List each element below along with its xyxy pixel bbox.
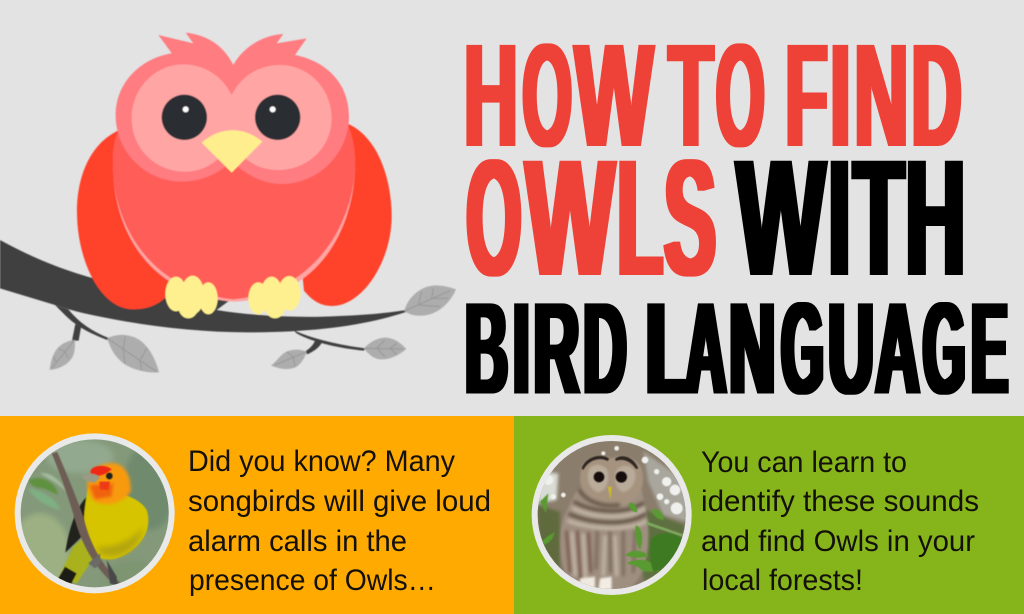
title xyxy=(464,14,1008,422)
title line 3: G xyxy=(781,274,824,422)
head with ear tufts xyxy=(116,33,349,184)
title line 3: G xyxy=(923,274,965,422)
title line 1: I xyxy=(830,14,851,178)
title line 2: W xyxy=(526,126,615,311)
title line 1: T xyxy=(668,14,713,178)
text: you can learn xyxy=(701,446,979,597)
title line 2 xyxy=(466,126,966,311)
title line 3: N xyxy=(729,274,775,422)
text: did you know: presence of Owls… xyxy=(189,564,436,597)
wings xyxy=(77,124,392,309)
illustration: owl on a branch xyxy=(0,33,456,373)
beak xyxy=(202,130,262,173)
title line 3: D xyxy=(583,274,626,422)
title line 3: R xyxy=(534,274,579,422)
branch xyxy=(0,240,406,354)
text: you can learn: and find Owls in your xyxy=(701,525,975,558)
title line 1: N xyxy=(854,14,908,178)
title line 1: O xyxy=(522,14,572,178)
panel: orange songbird fact xyxy=(0,416,514,614)
photo: western tanager xyxy=(10,433,177,593)
title line 2: S xyxy=(664,126,716,311)
title line 2: O xyxy=(466,126,521,311)
title line 3: U xyxy=(828,274,874,422)
feet xyxy=(165,276,301,318)
title line 1: F xyxy=(785,14,828,178)
text: you can learn: identify these sounds xyxy=(701,485,979,518)
title line 2: W xyxy=(736,126,826,311)
eyes xyxy=(162,95,207,140)
body xyxy=(113,127,355,302)
title line 3: A xyxy=(876,274,920,422)
title: D xyxy=(911,14,962,178)
title line 2: T xyxy=(853,126,904,311)
title line 1: O xyxy=(716,14,765,178)
text: did you know: Did you know? Many xyxy=(188,445,455,478)
leaves xyxy=(50,285,456,373)
title line 1: W xyxy=(575,14,653,178)
title line 3: A xyxy=(685,274,726,422)
title line 3 xyxy=(465,274,1008,422)
title line 2: H xyxy=(905,126,966,311)
text: did you know xyxy=(188,445,491,597)
text: did you know: songbirds will give loud xyxy=(188,485,491,518)
text: did you know: alarm calls in the xyxy=(188,525,407,558)
panel: green learn sounds xyxy=(514,416,1024,614)
title line 3: B xyxy=(465,274,508,422)
text: you can learn: local forests! xyxy=(702,564,863,597)
title line 1 xyxy=(464,14,962,178)
title line 1: H xyxy=(464,14,518,178)
title line 2: L xyxy=(617,126,663,311)
text: you can learn: You can learn to xyxy=(701,446,907,479)
title line 2: I xyxy=(828,126,850,311)
title line 3: I xyxy=(513,274,529,422)
eye discs xyxy=(132,64,332,172)
photo: barred owl xyxy=(530,435,693,598)
title line 3: L xyxy=(645,274,693,422)
